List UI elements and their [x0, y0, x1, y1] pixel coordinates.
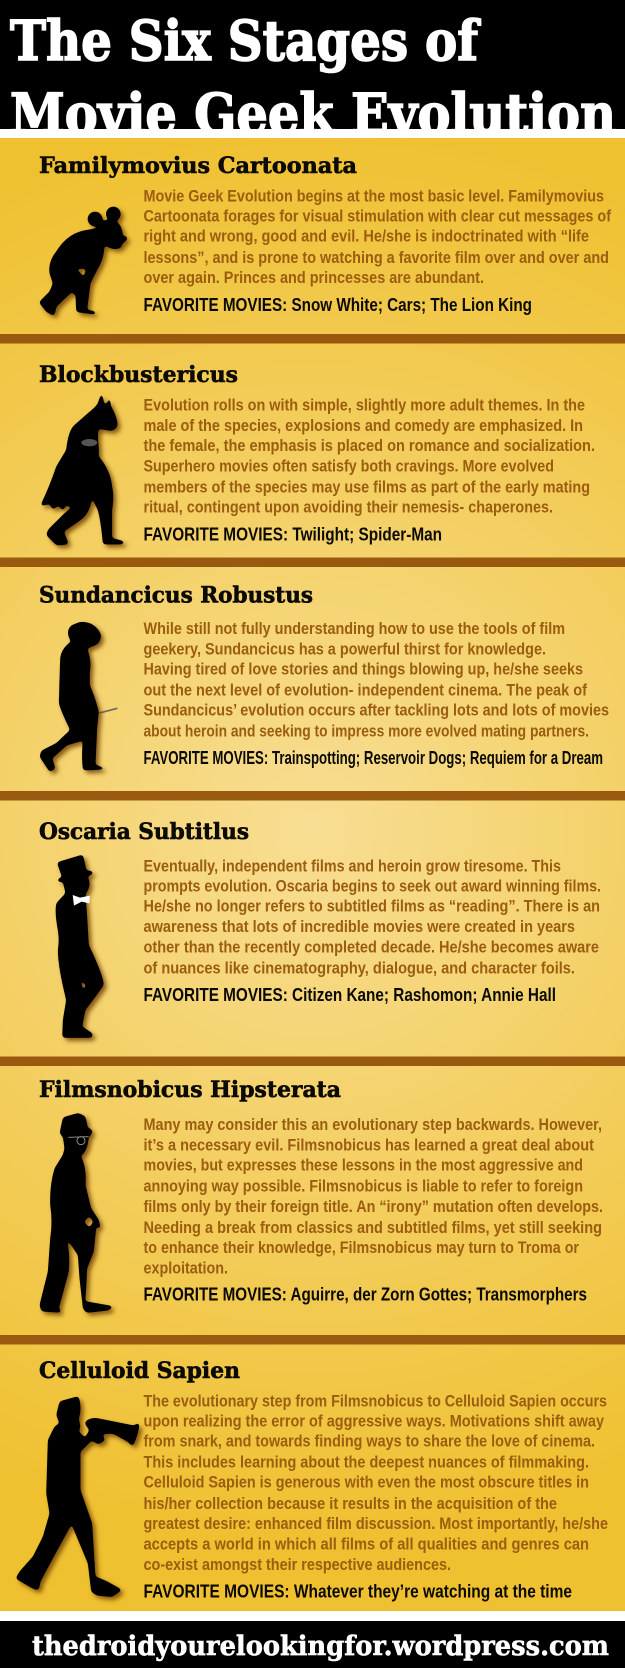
footer banner — [0, 1611, 625, 1668]
icon: silhouette with megaphone — [16, 1397, 139, 1597]
heading: Filmsnobicus Hipsterata — [39, 1077, 341, 1103]
panel: Filmsnobicus Hipsterata — [39, 1077, 603, 1312]
panel: Celluloid Sapien: his/her collection because it results in the acquisition of the — [144, 1495, 557, 1513]
divider bar 2 — [0, 558, 625, 567]
divider bar 3 — [0, 791, 625, 800]
panel: Sundancicus Robustus: geekery, Sundancicus has a powerful thirst for knowledge. — [144, 640, 546, 658]
icon: mouse-eared child silhouette — [39, 207, 127, 316]
icon: walking silhouette with syringe — [40, 622, 117, 772]
favorite movies: FAVORITE MOVIES: Citizen Kane; Rashomon; Annie Hall — [144, 985, 556, 1005]
icon: hat and glasses silhouette — [40, 1113, 113, 1312]
panel: Sundancicus Robustus — [39, 582, 609, 772]
icon: caped bat-eared silhouette — [41, 393, 124, 545]
panel: Celluloid Sapien — [16, 1358, 608, 1602]
panel: Filmsnobicus Hipsterata: exploitation. — [144, 1259, 228, 1277]
heading: Celluloid Sapien — [39, 1358, 240, 1384]
body text: Eventually, independent films and heroin grow tiresome. This — [144, 857, 561, 875]
icon: top hat and bow tie silhouette — [56, 855, 103, 1037]
panel: Blockbustericus: ritual, contingent upon avoiding their nemesis- chaperones. — [144, 499, 553, 517]
favorite movies: FAVORITE MOVIES: Snow White; Cars; The Lion King — [144, 295, 532, 315]
panel: Oscaria Subtitlus: awareness that lots of incredible movies were created in years — [144, 918, 575, 936]
heading: Oscaria Subtitlus — [39, 819, 249, 845]
divider bar 4 — [0, 1056, 625, 1066]
favorite movies: FAVORITE MOVIES: Twilight; Spider-Man — [144, 525, 442, 545]
panel: Blockbustericus: Superhero movies often satisfy both cravings. More evolved — [144, 458, 554, 476]
heading: Sundancicus Robustus — [39, 582, 313, 608]
heading: Blockbustericus — [39, 362, 238, 388]
divider bar 5 — [0, 1335, 625, 1344]
heading: Familymovius Cartoonata — [39, 153, 357, 179]
panel: Familymovius Cartoonata: over again. Princes and princesses are abundant. — [144, 269, 484, 287]
title banner — [0, 0, 625, 146]
panel: Blockbustericus — [39, 362, 595, 545]
title banner: The Six Stages of — [10, 8, 481, 73]
panel: Oscaria Subtitlus: of nuances like cinematography, dialogue, and character foils. — [144, 959, 575, 977]
footer banner: thedroidyourelookingfor.wordpress.com — [32, 1631, 609, 1662]
panel: Celluloid Sapien: co-exist amongst their respective audiences. — [144, 1556, 451, 1574]
panel: Familymovius Cartoonata — [39, 153, 611, 316]
body text: While still not fully understanding how to use the tools of film — [144, 620, 565, 638]
panel: Oscaria Subtitlus — [39, 819, 601, 1037]
divider bar 1 — [0, 334, 625, 344]
